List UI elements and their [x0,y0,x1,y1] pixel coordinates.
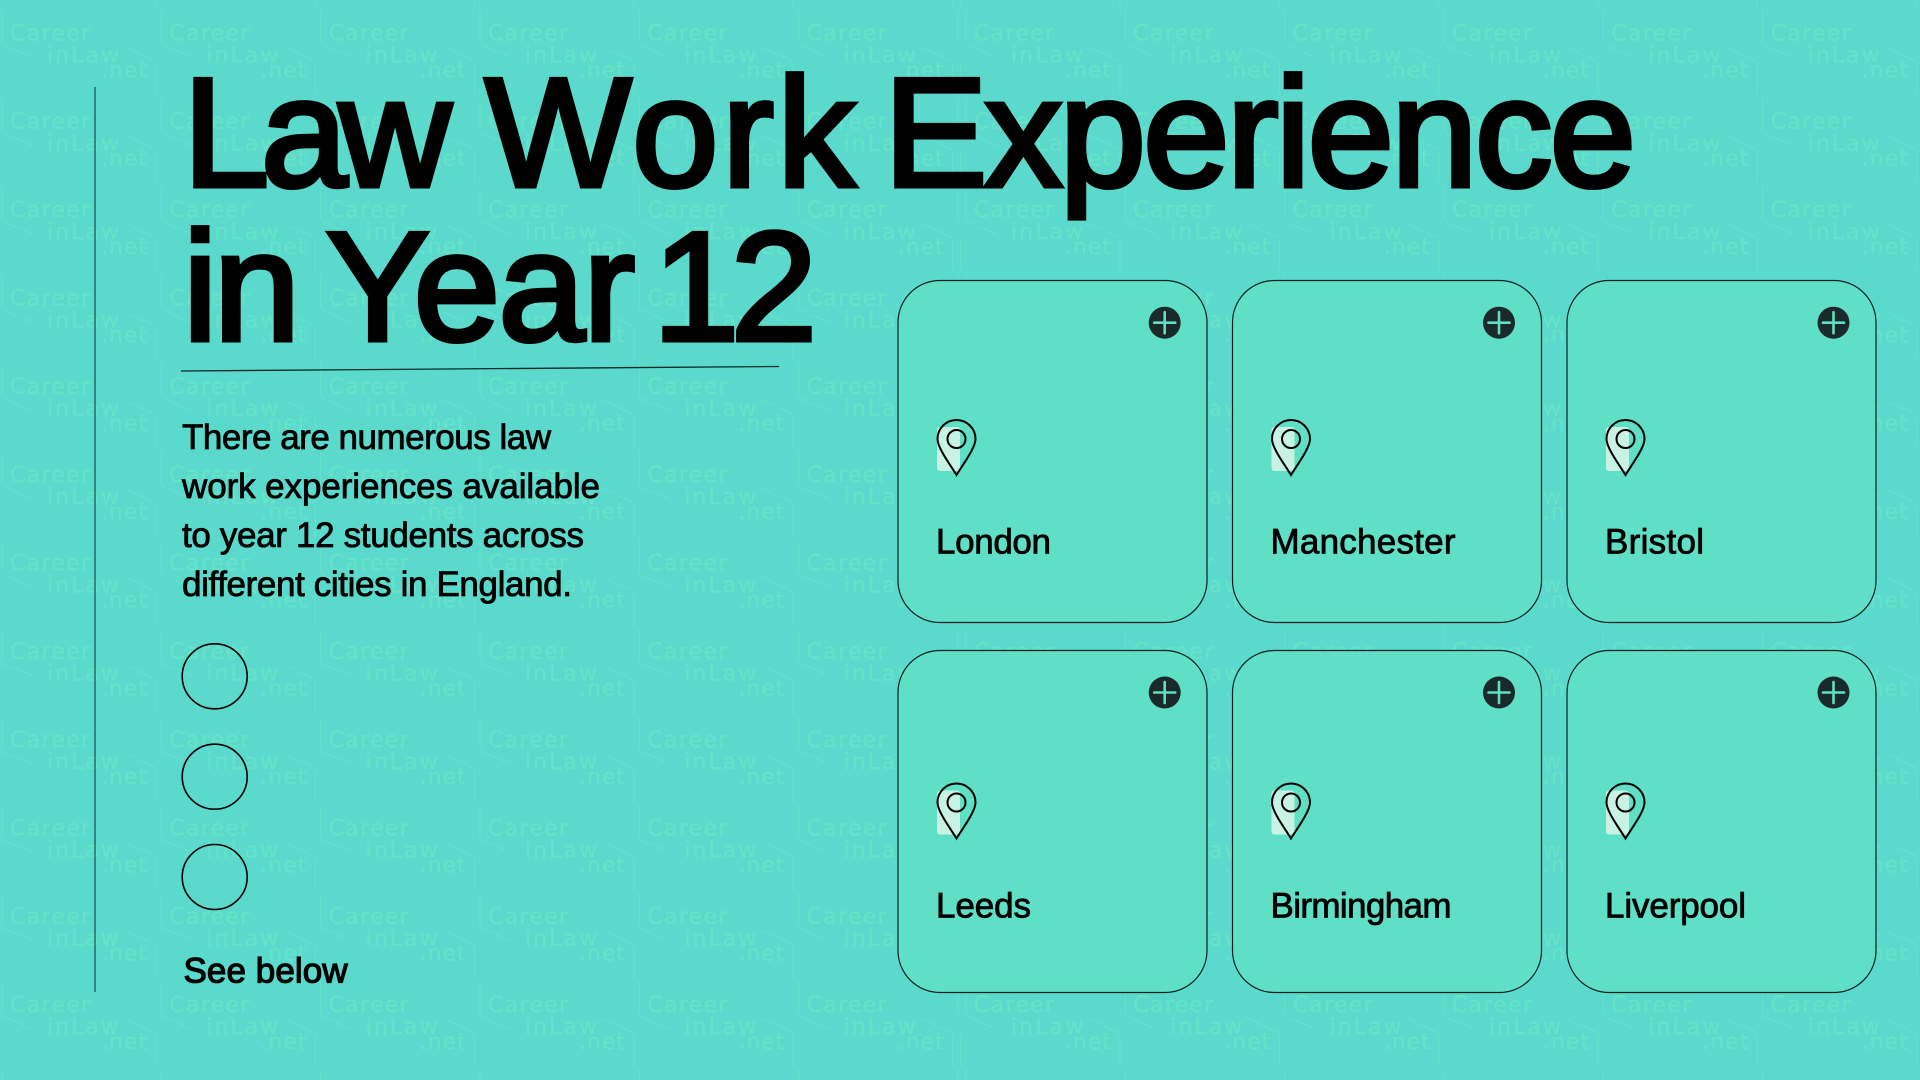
card: Manchester: Manchester [1270,522,1456,562]
see below label: See below [184,952,348,990]
card: Birmingham [1232,650,1542,992]
card: Liverpool: Liverpool [1605,886,1746,926]
card: Manchester [1232,280,1542,622]
intro text: work experiences available [181,467,600,506]
title: Law [183,46,452,219]
intro text [181,418,600,604]
card: London [898,280,1207,622]
card: Leeds: Leeds [936,886,1031,926]
title: in [183,200,300,373]
intro text: different cities in England. [182,565,572,604]
title: Work [485,46,856,219]
title [183,46,1636,373]
vertical rule [94,87,96,992]
card: Leeds [898,650,1207,992]
card: London: London [936,522,1051,562]
card: Liverpool [1567,650,1876,992]
title underline [181,366,779,371]
card: Bristol [1567,280,1876,622]
intro text: There are numerous law [182,418,552,457]
intro text: to year 12 students across [182,516,584,555]
title: Experience [884,46,1636,219]
title: Year [326,200,635,373]
empty bullet circles [182,644,247,910]
card: Bristol: Bristol [1605,522,1704,562]
title: 12 [653,200,817,373]
card: Birmingham: Birmingham [1270,886,1452,926]
